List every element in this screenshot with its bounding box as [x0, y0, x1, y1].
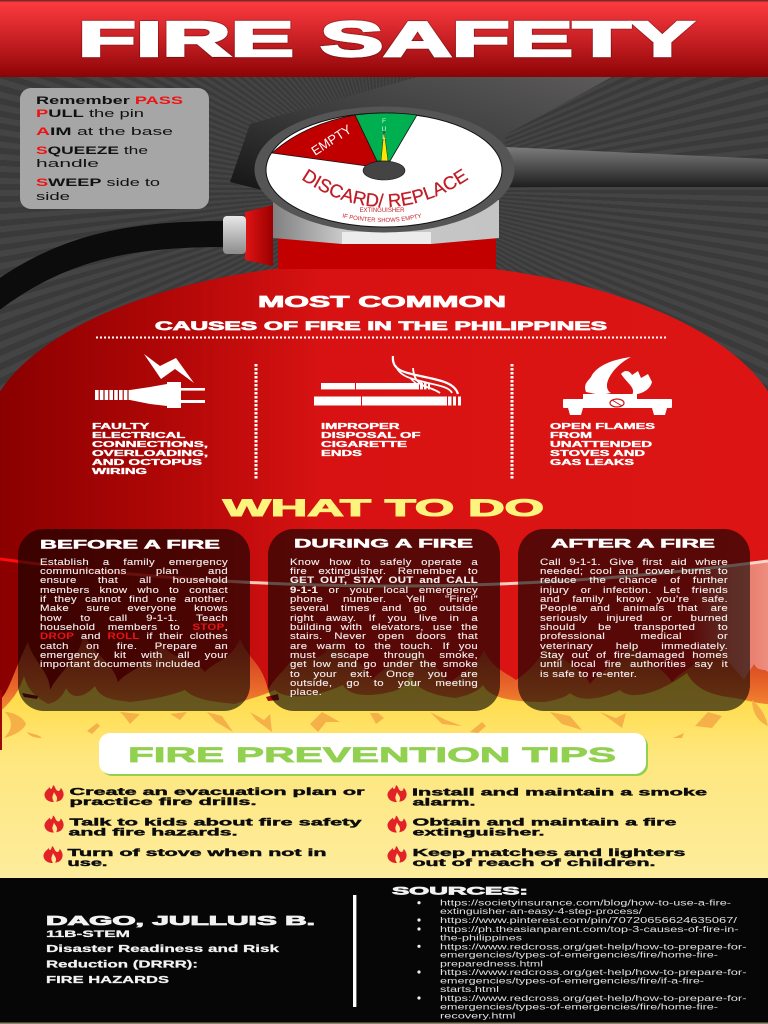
- extinguisher valve and connector: [223, 205, 273, 266]
- text: faulty electrical: FAULTY: [92, 422, 151, 431]
- text: after a fire: Call 9-1-1. Give first aid where: [540, 557, 728, 568]
- PASS panel: S QUEEZE the: [36, 145, 137, 157]
- heading: before a fire: BEFORE A FIRE: [40, 539, 221, 551]
- text: after a fire: seriously injured or burned: [540, 613, 728, 624]
- text: faulty electrical: AND OCTOPUS: [92, 458, 203, 467]
- text: during a fire: building with elevators, use the: [290, 622, 478, 633]
- text: during a fire: are warm to the touch. If you: [290, 641, 478, 652]
- text: before a fire: if they cannot find one another.: [40, 594, 228, 605]
- author block: [46, 913, 315, 986]
- text: during a fire: fire extinguisher. Remember to: [290, 566, 478, 577]
- text: improper disposal: CIGARETTE: [321, 440, 408, 449]
- text: after a fire: [540, 557, 728, 680]
- PASS panel: handle: [36, 158, 99, 170]
- heading: after a fire: AFTER A FIRE: [551, 539, 716, 551]
- footer: [0, 878, 768, 1024]
- text: faulty electrical: ELECTRICAL: [92, 431, 185, 440]
- text: after a fire: veterinary help immediately.: [540, 641, 728, 652]
- sources list: extinguisher-an-easy-4-step-process/: [440, 907, 643, 916]
- pressure gauge: [254, 106, 514, 232]
- text: before a fire: communications plan and: [40, 566, 228, 577]
- text: during a fire: [290, 557, 478, 698]
- text: improper disposal: ENDS: [321, 449, 363, 458]
- text: open flames: GAS LEAKS: [550, 458, 635, 467]
- gauge: discard replace: [294, 174, 476, 207]
- text: before a fire: household members to STOP,: [40, 622, 228, 633]
- PASS panel: A IM at the base: [36, 126, 128, 138]
- sources list: starts.html: [440, 985, 499, 994]
- author block: Disaster Readiness and Risk: [46, 944, 280, 955]
- tank seam and lower glow: [0, 559, 768, 700]
- text: during a fire: GET OUT, STAY OUT and CALL: [290, 575, 478, 586]
- flames background: [0, 632, 768, 878]
- PASS panel: S WEEP side to: [36, 177, 136, 189]
- banner: fire prevention tips: [99, 733, 648, 776]
- text: open flames: OPEN FLAMES: [550, 422, 656, 431]
- PASS panel: Remember PASS: [36, 95, 164, 107]
- text: before a fire: catch on fire. Prepare an: [40, 641, 228, 652]
- heading: FIRE SAFETY: FIRE SAFETY: [78, 12, 694, 67]
- tips list: Obtain and maintain a fire: [412, 818, 677, 829]
- icons: red flame bullets: [44, 785, 407, 863]
- author block: Reduction (DRRR):: [46, 960, 198, 971]
- heading: causes of fire: CAUSES OF FIRE IN THE PHILIPPINES: [155, 319, 607, 333]
- sources list: emergencies/types-of-emergencies/fire/home-fire-: [440, 951, 719, 960]
- panel: after a fire: [518, 529, 750, 711]
- text: before a fire: members know who to contact: [40, 585, 228, 596]
- text: faulty electrical: WIRING: [92, 467, 147, 476]
- sources heading: SOURCES:: [392, 886, 528, 898]
- PASS panel: P ULL the pin: [36, 108, 119, 120]
- icon: flame on stove: [563, 357, 672, 415]
- heading: fire prevention tips: FIRE PREVENTION TIPS: [128, 743, 616, 767]
- gauge: pointer note: IF POINTER SHOWS EMPTY: [342, 214, 421, 222]
- text: during a fire: Know how to safely operate a: [290, 557, 478, 568]
- text: open flames: FROM: [550, 431, 593, 440]
- text: during a fire: must escape through smoke,: [290, 650, 478, 661]
- background: dark radial stripes: [0, 0, 768, 700]
- heading: most common: MOST COMMON: [258, 294, 506, 311]
- text: after a fire: is safe to re-enter.: [540, 669, 637, 680]
- sources list: emergencies/types-of-emergencies/fire/home-fire-: [440, 1003, 719, 1012]
- panel: before a fire: [18, 529, 250, 711]
- text: before a fire: ensure that all household: [40, 575, 228, 586]
- text: after a fire: professional medical or: [540, 631, 728, 642]
- sources list: [417, 899, 747, 1020]
- sources list: https://ph.theasianparent.com/top-3-causes-of-fire-in-: [440, 925, 739, 934]
- text: faulty electrical: CONNECTIONS,: [92, 440, 208, 449]
- text: after a fire: until local fire authorities say it: [540, 659, 728, 670]
- tips list: out of reach of children.: [412, 858, 656, 869]
- text: during a fire: to your exit. Once you are: [290, 669, 478, 680]
- flame embers: [4, 700, 768, 738]
- gauge: full sector: [355, 113, 417, 161]
- text: after a fire: Stay out of fire-damaged homes: [540, 650, 728, 661]
- sources list: https://societyinsurance.com/blog/how-to-use-a-fire-: [440, 899, 732, 908]
- text: before a fire: how to call 9-1-1. Teach: [40, 613, 228, 624]
- text: before a fire: emergency kit with all your: [40, 650, 228, 661]
- heading: what to do: WHAT TO DO: [223, 495, 544, 522]
- text: after a fire: should be transported to: [540, 622, 728, 633]
- text: during a fire: get low and go under the smoke: [290, 659, 478, 670]
- sources list: preparedness.html: [440, 959, 543, 968]
- gauge: EMPTY label: EMPTY: [308, 121, 354, 159]
- tips list: use.: [68, 858, 108, 869]
- text: during a fire: phone number. Yell "Fire!": [290, 594, 478, 605]
- text: during a fire: outside, go to your meeting: [290, 678, 478, 689]
- text: after a fire: and family know you’re safe.: [540, 594, 728, 605]
- icon: electrical plug with lightning: [95, 354, 205, 408]
- PASS panel: [20, 88, 209, 209]
- tips list: Create an evacuation plan or: [70, 787, 365, 798]
- author block: FIRE HAZARDS: [46, 975, 170, 986]
- tips list: Turn of stove when not in: [68, 848, 326, 859]
- text: after a fire: injury or infection. Let friends: [540, 585, 728, 596]
- heading: during a fire: DURING A FIRE: [294, 539, 474, 551]
- text: after a fire: needed; cool and cover burns to: [540, 566, 728, 577]
- sources list: the-philippines: [440, 933, 522, 942]
- text: after a fire: reduce the chance of further: [540, 575, 728, 586]
- text: faulty electrical: OVERLOADING,: [92, 449, 208, 458]
- pressure gauge: DISCARD/ REPLACE: [302, 168, 468, 208]
- tips list: Install and maintain a smoke: [412, 788, 708, 799]
- text: before a fire: DROP and ROLL if their clothes: [40, 631, 228, 642]
- gauge: hub: [363, 161, 405, 180]
- text: during a fire: stairs. Never open doors that: [290, 631, 478, 642]
- sources list: https://www.redcross.org/get-help/how-to-prepare-for-: [440, 994, 747, 1003]
- sources list: https://www.pinterest.com/pin/70720656624635067/: [440, 916, 738, 925]
- extinguisher handle: [230, 77, 768, 190]
- gauge: extinguisher note: EXTINGUISHER: [359, 208, 405, 214]
- text: open flames: UNATTENDED: [550, 440, 652, 449]
- author block: DAGO, JULLUIS B.: [46, 913, 315, 928]
- text: before a fire: [40, 557, 228, 670]
- tips list: extinguisher.: [412, 828, 545, 839]
- text: during a fire: place.: [290, 687, 322, 698]
- extinguisher neck: [273, 200, 499, 269]
- gauge: FUL label: U: [382, 126, 387, 133]
- text: during a fire: right away. If you live in a: [290, 613, 478, 624]
- tips list: Talk to kids about fire safety: [70, 818, 362, 829]
- author block: 11B-STEM: [46, 929, 130, 940]
- tips list: Keep matches and lighters: [412, 848, 686, 859]
- text: after a fire: People and animals that are: [540, 603, 728, 614]
- gauge: FUL label: F: [382, 118, 386, 125]
- tips list: alarm.: [412, 798, 476, 808]
- tips list: practice fire drills.: [70, 797, 257, 808]
- text: before a fire: important documents included: [40, 659, 200, 670]
- icon: cigarettes with smoke: [314, 356, 461, 406]
- text: improper disposal: DISPOSAL OF: [321, 431, 421, 440]
- text: before a fire: Make sure everyone knows: [40, 603, 228, 614]
- tips list: and fire hazards.: [68, 828, 238, 838]
- text: open flames: STOVES AND: [550, 449, 645, 458]
- hose: [0, 234, 226, 304]
- gauge: empty sector: [272, 115, 382, 166]
- sources list: recovery.html: [440, 1011, 516, 1020]
- text: during a fire: several times and go outside: [290, 603, 478, 614]
- panel: during a fire: [268, 529, 500, 711]
- extinguisher body: [0, 262, 768, 742]
- gauge: pointer: [381, 130, 388, 161]
- tips list: [68, 787, 708, 869]
- title banner: [0, 0, 768, 77]
- text: improper disposal: IMPROPER: [321, 422, 400, 431]
- text: during a fire: 9-1-1 or your local emergency: [290, 585, 478, 596]
- sources list: https://www.redcross.org/get-help/how-to-prepare-for-: [440, 942, 747, 951]
- gauge: FUL label: L: [382, 134, 386, 141]
- PASS panel: side: [36, 191, 70, 203]
- sources list: emergencies/types-of-emergencies/fire/if-a-fire-: [440, 976, 705, 985]
- text: before a fire: Establish a family emergency: [40, 557, 228, 568]
- sources list: https://www.redcross.org/get-help/how-to-prepare-for-: [440, 968, 747, 977]
